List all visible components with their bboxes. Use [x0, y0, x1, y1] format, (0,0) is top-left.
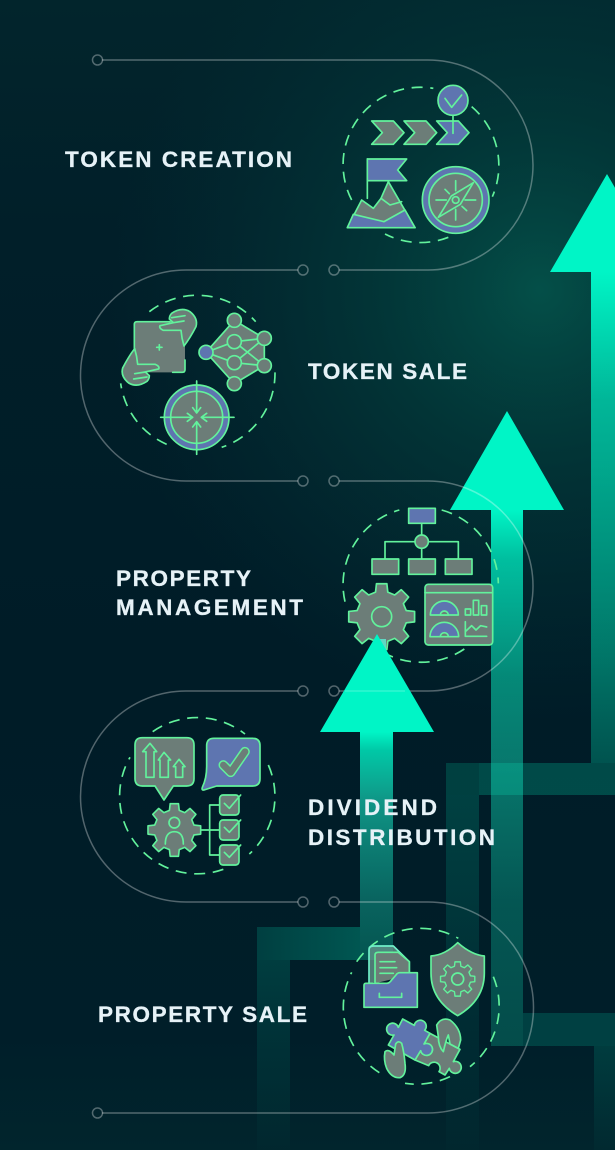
- winding connector line: [81, 55, 534, 1118]
- icon: token sale: [121, 295, 275, 454]
- icon: property sale: [343, 928, 499, 1084]
- heading: property management: [116, 566, 303, 620]
- heading: token creation: TOKEN CREATION: [65, 147, 292, 172]
- arrow: middle: [450, 411, 615, 1150]
- heading: property management: PROPERTY: [116, 566, 251, 591]
- heading: property sale: PROPERTY SALE: [98, 1002, 307, 1027]
- arrow: left, shaft and elbow: [257, 732, 393, 1150]
- icon: token creation: [343, 85, 499, 243]
- heading: dividend distribution: DISTRIBUTION: [308, 825, 495, 850]
- heading: dividend distribution: [308, 795, 495, 850]
- arrow: right, tallest: [446, 174, 615, 1150]
- heading: property management: MANAGEMENT: [116, 595, 303, 620]
- icon: property management: [343, 508, 498, 662]
- icon: dividend distribution: [120, 718, 275, 874]
- arrow: left, head over the gear: [320, 634, 434, 732]
- heading: token sale: TOKEN SALE: [308, 359, 467, 384]
- heading: dividend distribution: DIVIDEND: [308, 795, 437, 820]
